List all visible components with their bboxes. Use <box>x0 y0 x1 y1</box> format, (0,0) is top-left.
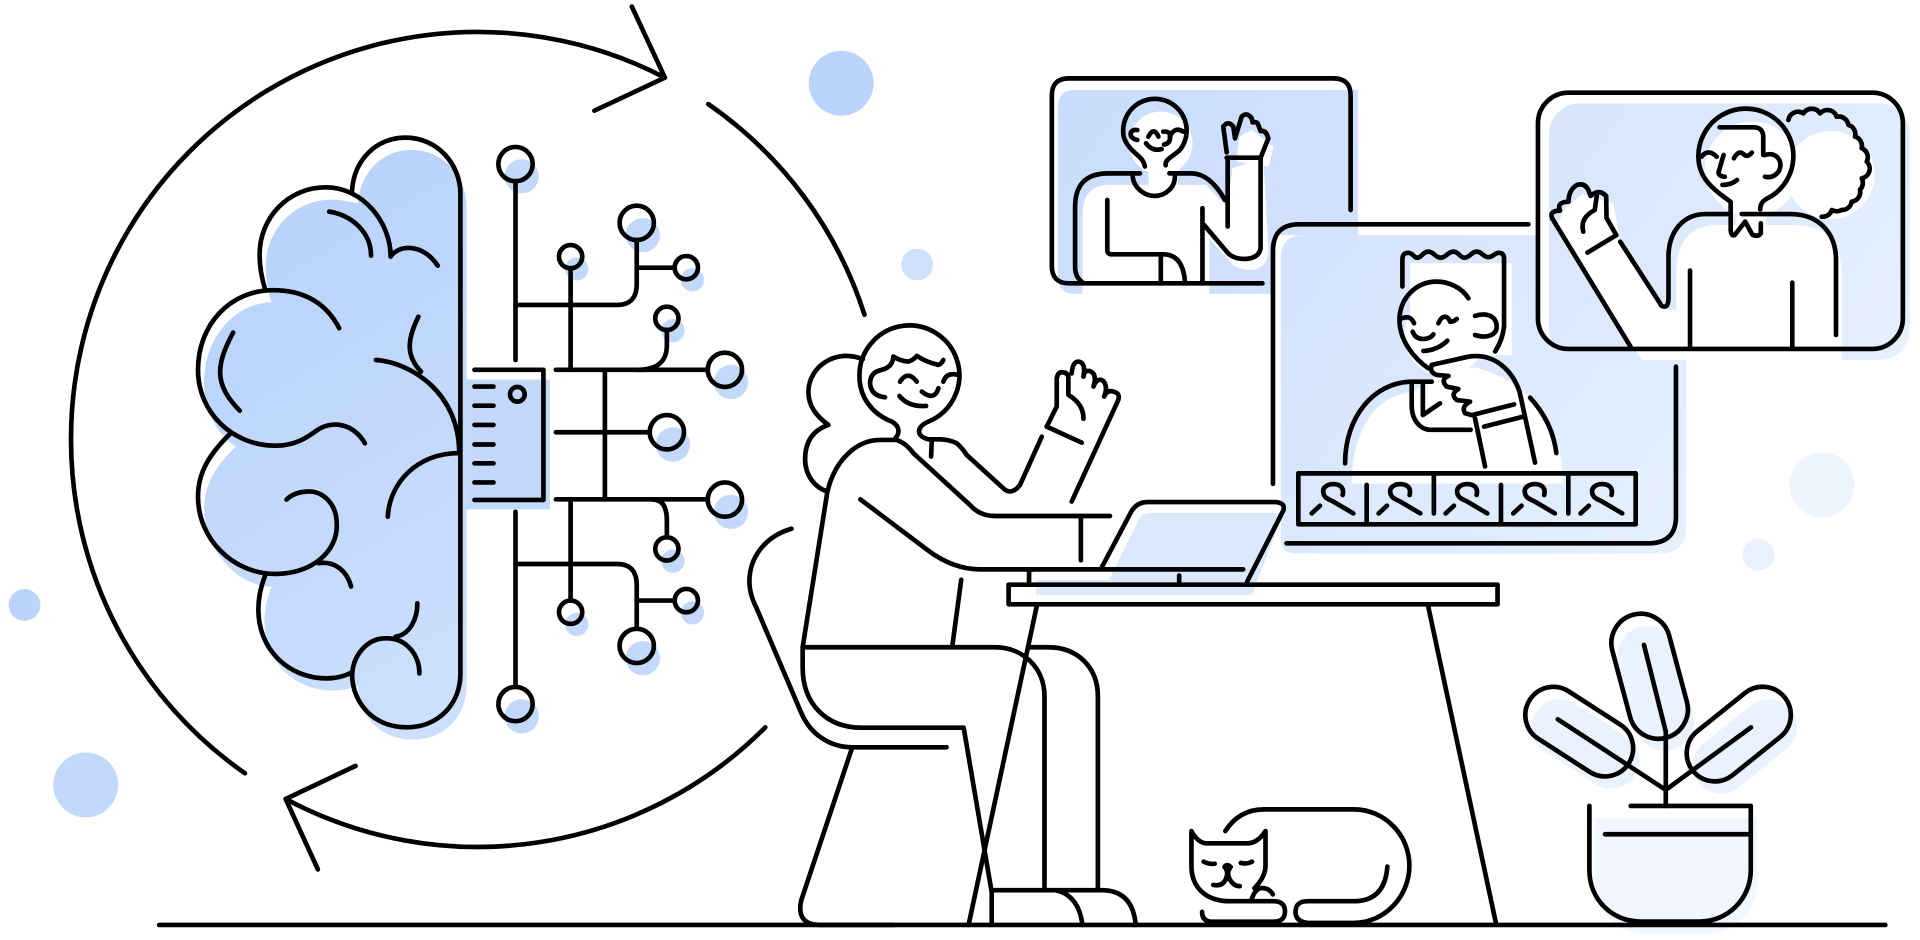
torso <box>827 440 1110 516</box>
participant strip <box>1298 473 1636 524</box>
desk <box>969 585 1498 925</box>
laptop outline <box>1029 502 1284 584</box>
window 2 with thinking person <box>1273 224 1676 543</box>
ground line <box>159 923 1885 927</box>
caller 2 silhouette <box>1352 263 1563 484</box>
brain outline <box>198 138 460 727</box>
circuit lines and nodes <box>498 147 742 721</box>
window 3 with waving person <box>1538 93 1903 349</box>
head and hair <box>859 325 959 439</box>
caller 3 silhouette <box>1557 121 1875 360</box>
laptop screen fill <box>1036 513 1283 595</box>
caller 1 silhouette <box>1082 112 1273 294</box>
circular arrows around the brain <box>71 7 864 869</box>
video call windows <box>1052 78 1910 553</box>
brain fill <box>204 150 467 740</box>
window fills <box>1058 90 1358 294</box>
brain and circuit illustration <box>198 138 748 740</box>
chip fill <box>467 380 550 509</box>
plant fills <box>1521 619 1808 934</box>
plant outlines <box>1515 607 1802 922</box>
potted plant <box>1515 607 1808 934</box>
raised arm and hand <box>928 437 1042 491</box>
chip outline <box>474 370 543 500</box>
seated woman <box>803 325 1243 925</box>
sleeping cat <box>1191 809 1409 923</box>
chair <box>749 529 947 925</box>
node shadows <box>504 159 748 733</box>
laptop <box>1029 502 1284 595</box>
decorative blue dots <box>9 51 1854 817</box>
window 1 with waving person <box>1052 78 1351 283</box>
